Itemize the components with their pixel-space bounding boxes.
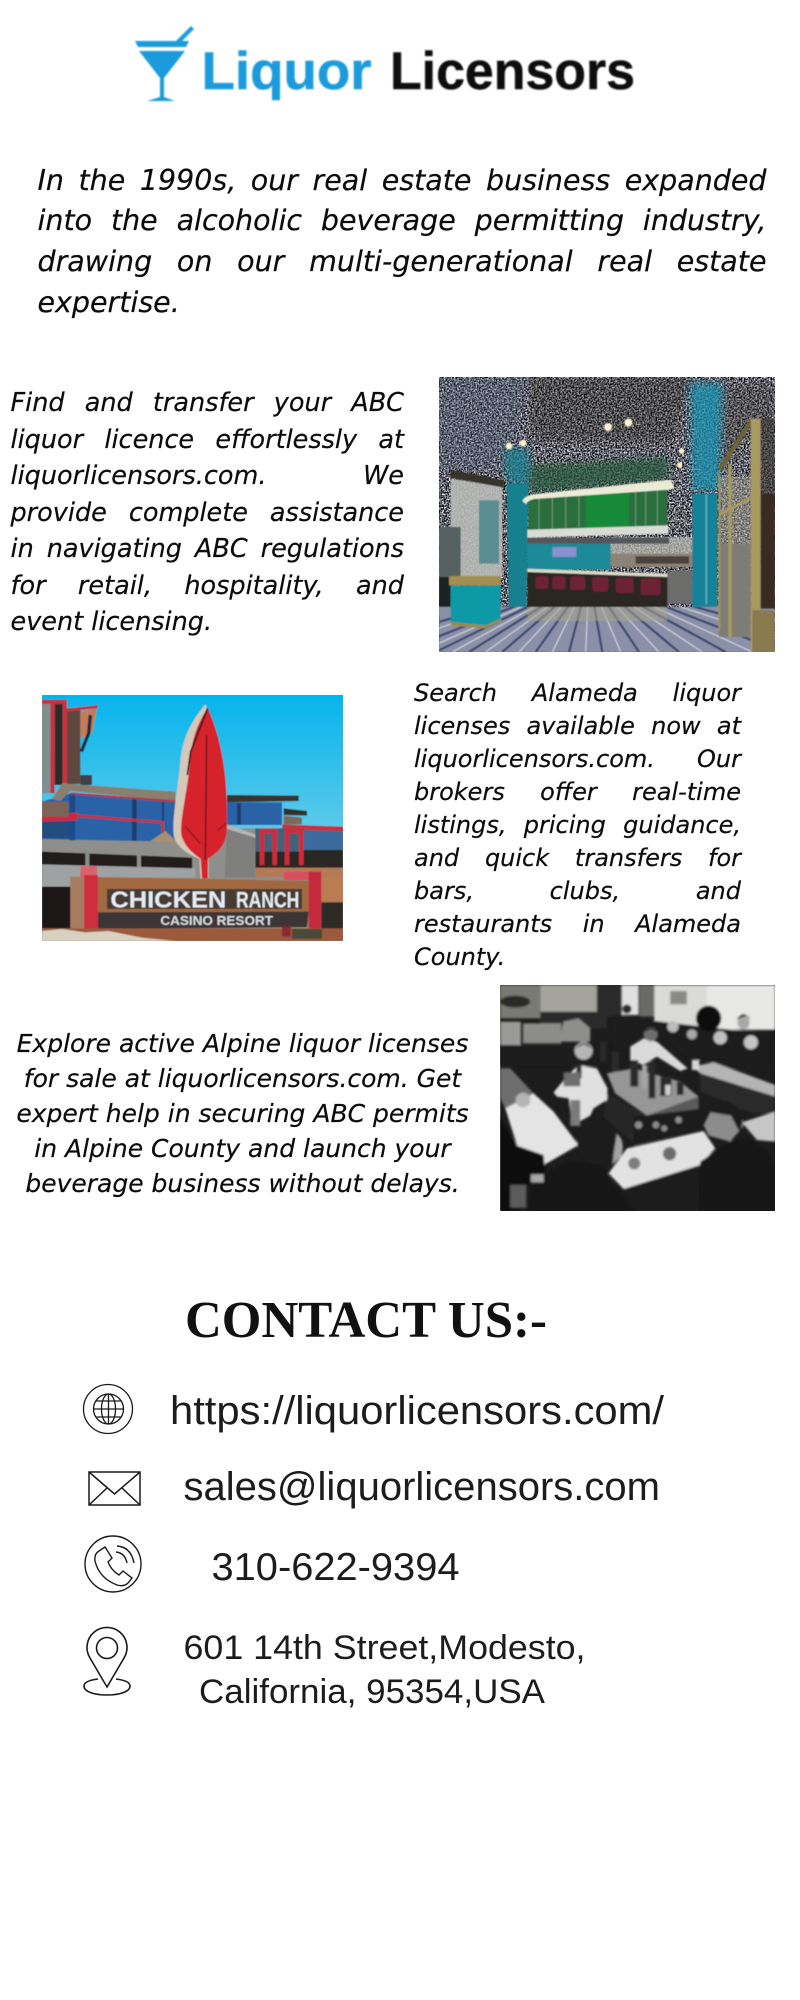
text block: ABC liquor licence: in navigating ABC regulations: [10, 534, 404, 564]
icon: envelope: [89, 1472, 140, 1505]
teal left column: [507, 484, 528, 612]
icon: cocktail glass: [135, 26, 194, 101]
bartender one: [553, 1065, 607, 1126]
phone number: 310-622-9394: [212, 1546, 460, 1589]
right counter: [691, 1062, 775, 1097]
grey block and awning: [225, 824, 255, 878]
intro text block: drawing on our multi-generational real estate: [38, 245, 766, 278]
speckled ceiling: [439, 377, 775, 652]
text block: Alpine licenses: in Alpine County and launch your: [34, 1134, 451, 1163]
red canopy frames: [262, 831, 301, 865]
text block: Alpine licenses: expert help in securing ABC permits: [16, 1099, 469, 1128]
hotel tower: [42, 703, 50, 793]
foreground patron left: [526, 1162, 633, 1211]
green glass panel: [528, 487, 667, 530]
text block: Alameda licenses: [414, 678, 742, 971]
left lower patron: [500, 1118, 545, 1211]
email address: sales@liquorlicensors.com: [184, 1465, 660, 1509]
text block: Alpine licenses: beverage business without delays.: [25, 1169, 460, 1198]
sign text: Casino Resort: CASINO RESORT: [160, 914, 273, 928]
sky: [42, 695, 343, 828]
logo word: Liquor: Liquor: [202, 42, 372, 101]
text block: Alameda licenses: listings, pricing guidance,: [414, 811, 741, 839]
photo: Chicken Ranch casino sign: [42, 695, 343, 941]
text block: Alameda licenses: bars, clubs, and: [414, 877, 741, 905]
address line one: 601 14th Street,Modesto,: [184, 1629, 586, 1667]
brick wall: [255, 868, 343, 877]
wall: [500, 985, 540, 1018]
sign text: Chicken Ranch: [110, 887, 299, 913]
gold glass partition and wine wall: [719, 544, 751, 637]
centre counter with bottles: [606, 1068, 698, 1116]
text block: Alameda licenses: and quick transfers for: [414, 844, 741, 872]
logo: Liquor Licensors: [134, 25, 635, 102]
text block: Alpine licenses: Explore active Alpine liquor licenses: [17, 1029, 468, 1058]
casino sign board: [97, 877, 309, 912]
left glass window: [451, 479, 502, 577]
logo word: Licensors: Licensors: [390, 42, 635, 101]
icon: phone: [85, 1536, 141, 1592]
text block: ABC liquor licence: liquorlicensors.com. We: [10, 461, 404, 491]
icon: globe: [84, 1384, 132, 1434]
intro text block: expertise.: [38, 286, 180, 319]
address line two: California, 95354,USA: [199, 1673, 545, 1711]
intro text block: In the 1990s, our real estate business expanded: [38, 164, 766, 197]
text block: ABC liquor licence: Find and transfer your ABC: [10, 388, 404, 418]
text block: Alameda licenses: licenses available now at: [414, 712, 741, 740]
text block: ABC liquor licence: for retail, hospitality, and: [10, 570, 404, 600]
contact section: [82, 1292, 665, 1711]
red feather: [173, 704, 227, 878]
text block: Alameda licenses: Search Alameda liquor: [414, 678, 741, 706]
back wall and shelves: [527, 543, 611, 570]
text block: Alameda licenses: County.: [414, 943, 505, 971]
right wing: [227, 795, 299, 802]
text block: ABC liquor licence: event licensing.: [10, 607, 212, 637]
left white table: [500, 1068, 533, 1108]
concrete level: [42, 839, 192, 858]
text block: Alameda licenses: restaurants in Alameda: [414, 910, 741, 938]
text block: Alpine licenses: [16, 1029, 469, 1198]
heading: Contact us: CONTACT US:-: [185, 1292, 547, 1349]
glasses on counter: [628, 1157, 640, 1169]
background patrons and back bar: [613, 1015, 775, 1073]
rocky ground: [42, 928, 343, 941]
bar counter with stools: [527, 572, 667, 622]
intro text block: into the alcoholic beverage permitting industry,: [38, 204, 766, 237]
glass building: [42, 793, 175, 842]
ceiling lights: [506, 419, 684, 468]
bartender two: [630, 1038, 687, 1071]
intro text block: [38, 164, 767, 319]
text block: Alameda licenses: liquorlicensors.com. Our: [414, 745, 741, 773]
text block: ABC liquor licence: [10, 388, 405, 637]
photo: teal bar interior: [439, 377, 775, 652]
icon: location pin: [84, 1627, 130, 1695]
sign text: Chicken Ranch: CHICKEN: [110, 887, 226, 913]
photo: vintage black and white bar: [500, 985, 775, 1211]
teal right column: [692, 494, 717, 607]
text block: ABC liquor licence: provide complete assistance: [10, 498, 404, 528]
text block: ABC liquor licence: liquor licence effortlessly at: [10, 424, 404, 454]
text block: Alpine licenses: for sale at liquorlicensors.com. Get: [24, 1064, 461, 1093]
sign text: Chicken Ranch: RANCH: [236, 888, 299, 913]
floor stripes: [439, 606, 775, 652]
foreground patron right: [698, 1138, 775, 1211]
text block: Alameda licenses: brokers offer real-time: [414, 778, 741, 806]
website url: https://liquorlicensors.com/: [170, 1389, 665, 1433]
front white counter: [608, 1131, 715, 1189]
teal podium: [449, 576, 501, 585]
